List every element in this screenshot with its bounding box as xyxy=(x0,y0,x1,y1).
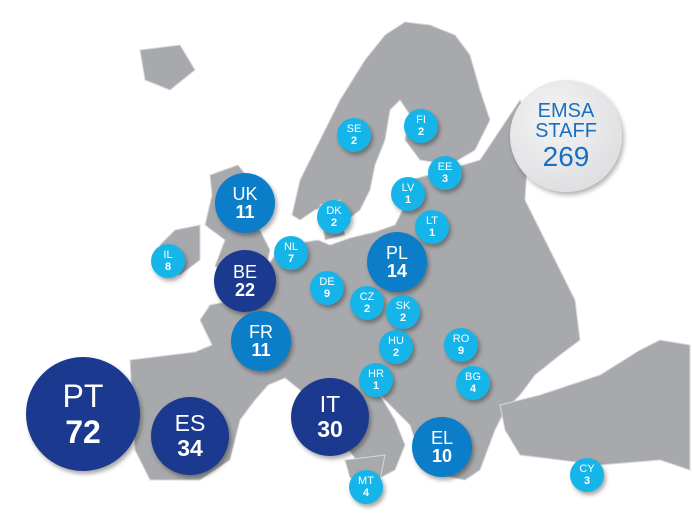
SK xyxy=(386,295,420,329)
IL: IL xyxy=(163,248,173,260)
EE xyxy=(428,156,462,190)
LV xyxy=(391,177,425,211)
ES: ES xyxy=(175,410,205,436)
HR: HR xyxy=(368,368,384,380)
BG: BG xyxy=(465,370,481,382)
CY: CY xyxy=(579,462,595,474)
DK: 2 xyxy=(331,216,337,228)
EL xyxy=(412,417,472,477)
HR: 1 xyxy=(373,380,379,392)
MT xyxy=(349,470,383,504)
PL: 14 xyxy=(387,261,407,281)
PL xyxy=(367,232,427,292)
DK xyxy=(317,200,351,234)
EMSA staff total: EMSA xyxy=(538,100,594,122)
FR: FR xyxy=(249,322,273,342)
IT: 30 xyxy=(317,416,343,442)
HU: HU xyxy=(388,334,404,346)
FI: FI xyxy=(416,114,426,126)
DK: DK xyxy=(326,204,342,216)
DE: 9 xyxy=(324,288,330,300)
UK: 11 xyxy=(235,202,255,222)
UK: UK xyxy=(232,184,258,204)
CZ xyxy=(350,286,384,320)
SE: 2 xyxy=(351,134,357,146)
LT: 1 xyxy=(429,226,435,238)
BE xyxy=(214,250,276,312)
CZ: CZ xyxy=(360,290,374,302)
PL: PL xyxy=(386,243,408,263)
IT xyxy=(291,378,369,456)
EMSA staff total: STAFF xyxy=(535,120,597,142)
RO: RO xyxy=(453,332,469,344)
EE: 3 xyxy=(442,172,448,184)
PT xyxy=(26,357,140,471)
UK xyxy=(215,173,275,233)
LT: LT xyxy=(426,214,438,226)
MT: MT xyxy=(358,474,374,486)
HU: 2 xyxy=(393,346,399,358)
EMSA staff total: 269 xyxy=(543,141,589,172)
IL: 8 xyxy=(165,260,171,272)
DE xyxy=(310,271,344,305)
LV: 1 xyxy=(405,194,411,206)
FI: 2 xyxy=(418,126,424,138)
RO xyxy=(444,328,478,362)
NL xyxy=(274,236,308,270)
HR xyxy=(359,363,393,397)
FR: 11 xyxy=(251,340,271,360)
IL xyxy=(151,244,185,278)
DE: DE xyxy=(319,276,335,288)
PT: 72 xyxy=(65,414,101,450)
LT xyxy=(415,210,449,244)
BE: BE xyxy=(233,262,257,282)
FI xyxy=(404,109,438,143)
LV: LV xyxy=(402,182,414,194)
FR xyxy=(231,311,291,371)
IT: IT xyxy=(320,391,340,417)
NL: NL xyxy=(284,240,298,252)
CY: 3 xyxy=(584,474,590,486)
ES xyxy=(151,397,229,475)
PT: PT xyxy=(63,378,103,414)
HU xyxy=(379,330,413,364)
EE: EE xyxy=(438,160,452,172)
SE: SE xyxy=(347,122,361,134)
SE xyxy=(337,118,371,152)
MT: 4 xyxy=(363,486,369,498)
EMSA staff total xyxy=(510,80,622,192)
SK: SK xyxy=(396,300,410,312)
EL: 10 xyxy=(432,446,452,466)
BG xyxy=(456,366,490,400)
SK: 2 xyxy=(400,312,406,324)
EL: EL xyxy=(431,428,453,448)
BG: 4 xyxy=(470,382,476,394)
BE: 22 xyxy=(235,280,255,300)
RO: 9 xyxy=(458,344,464,356)
CY xyxy=(570,458,604,492)
NL: 7 xyxy=(288,252,294,264)
ES: 34 xyxy=(177,435,203,461)
CZ: 2 xyxy=(364,302,370,314)
